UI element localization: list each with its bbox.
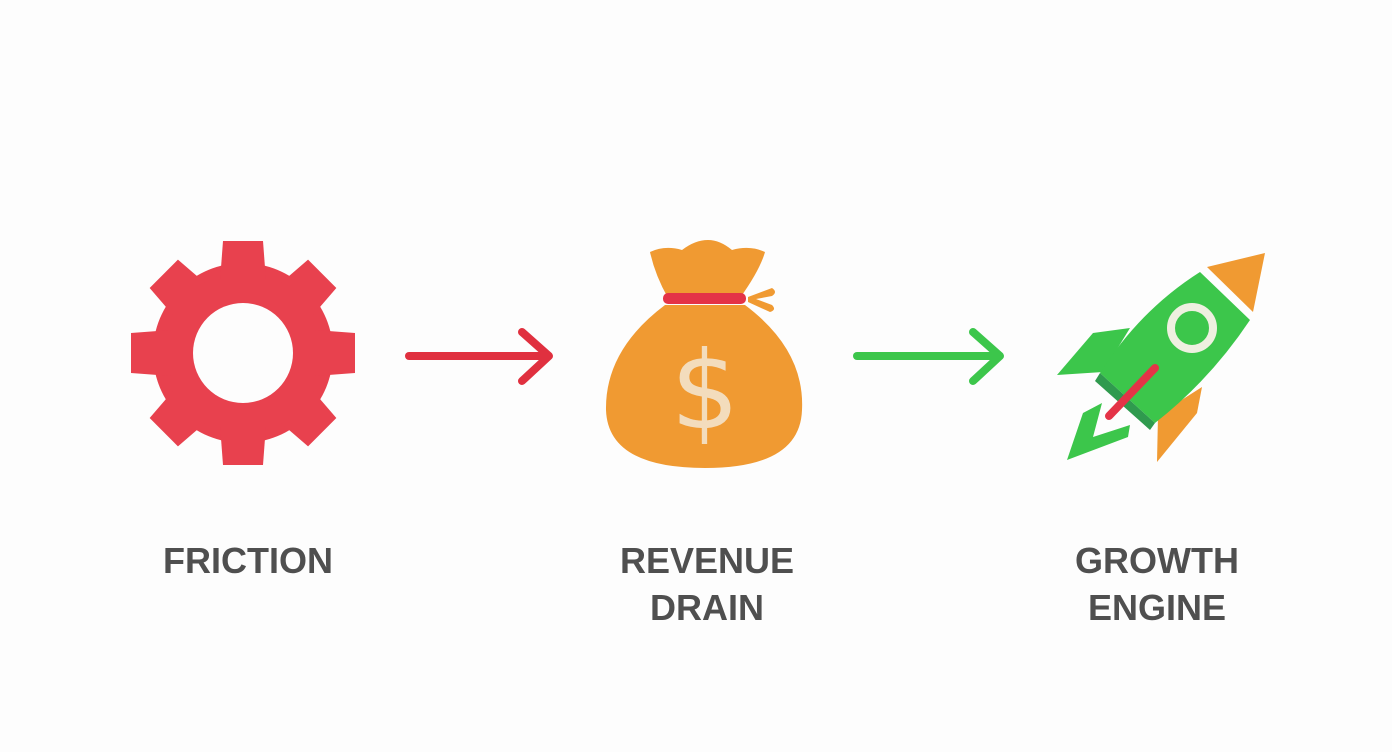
arrow: red — [409, 332, 549, 381]
label: growth engine: ENGINE — [1088, 587, 1226, 628]
icon: rocket — [1057, 253, 1265, 462]
icon: money bag: $ — [671, 329, 739, 454]
icon: gear — [131, 241, 355, 465]
label: friction: FRICTION — [163, 540, 333, 581]
label: growth engine: GROWTH — [1075, 540, 1239, 581]
icon: money bag — [606, 240, 802, 468]
label: revenue drain: DRAIN — [650, 587, 764, 628]
arrow: green — [857, 332, 1000, 381]
label: revenue drain: REVENUE — [620, 540, 794, 581]
